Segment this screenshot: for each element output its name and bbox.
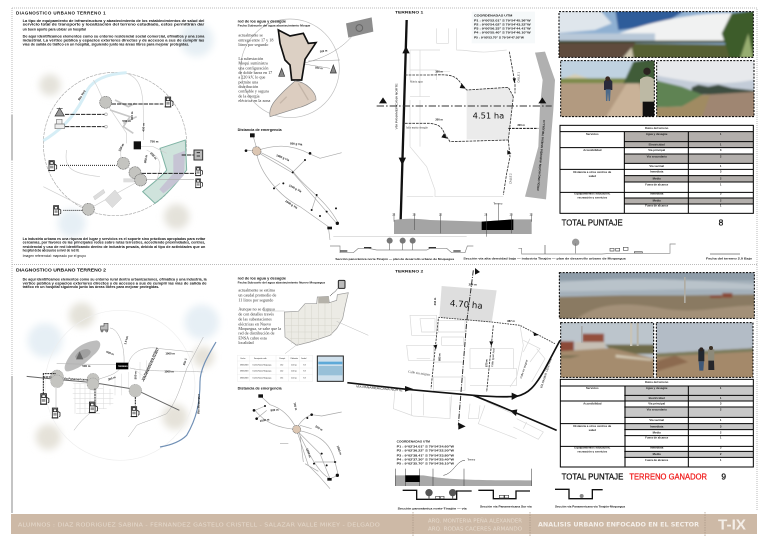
water heading: red de los agua y desagüe <box>238 19 286 23</box>
access routes <box>405 52 538 195</box>
water data table: 13.5 <box>280 377 283 379</box>
water network circle: 300 m <box>319 48 328 54</box>
caption B: Sección vía Panamericana Sur vía <box>480 505 532 509</box>
panel: plano terreno 1 <box>330 11 555 261</box>
elevation section <box>395 459 532 486</box>
parcel <box>439 286 497 323</box>
road profile A <box>330 237 473 253</box>
score table: 1 <box>720 164 722 168</box>
student names: ALUMNOS : DIAZ RODRIGUEZ SABINA - FERNANDEZ GASTELO CRISTELL - SALAZAR VALLE MIKEY - DELGADO <box>18 522 380 528</box>
distance labels: Vía Panamericana <box>63 376 88 382</box>
water data table <box>237 355 313 381</box>
score table: 2 <box>720 154 722 158</box>
score table: 2 <box>720 408 722 412</box>
panel: agua, desagüe y emergencias terreno 1 <box>238 17 373 240</box>
photo 2 <box>560 322 654 378</box>
total score: 9 <box>721 471 726 481</box>
street grid <box>73 360 147 414</box>
UTM coordinates: P1 : 9°02'34.01" S 79°54'24.60"W <box>397 444 454 448</box>
connector lines <box>43 374 135 405</box>
score table: 3 <box>720 402 722 406</box>
water data table: 09/01/2018 <box>240 371 248 373</box>
plan labels: CALLE 2 <box>509 173 513 184</box>
photo 3 <box>656 322 754 378</box>
emergency route map: 1500 g Via <box>288 183 303 194</box>
water data table: 8.3 <box>303 371 306 373</box>
section road profile C <box>555 489 603 499</box>
intro text: vértice pública y espacios exteriores directos y de accesos a sus de cumplir las vías de salida de <box>23 281 207 285</box>
profile C <box>710 253 740 255</box>
score table: Datos del terreno <box>645 380 669 384</box>
advisors: ARQ. RODAS CACERES ARMANDO <box>428 526 522 532</box>
UTM coordinates: P2 : 9°02'36.22" S 79°54'22.50"W <box>397 449 454 453</box>
plan labels: VÍA PANAMERICANA NORTE <box>395 83 399 129</box>
distance labels: 500 m <box>134 371 138 379</box>
connecting roads <box>57 328 203 437</box>
water network circle: 500 m <box>315 65 324 70</box>
urban diagnosis circle map <box>43 72 203 216</box>
score table: Fuera de alcance <box>645 458 669 462</box>
panel: fotos y tabla terreno 2 <box>555 270 757 509</box>
icons <box>165 97 173 107</box>
score table: 2 <box>720 452 722 456</box>
water description: a 220 kV, lo que <box>238 75 266 81</box>
connector lines <box>60 104 197 210</box>
dashed access routes <box>431 270 555 425</box>
water description: actualmente se estima <box>238 287 275 292</box>
score table: Accesibilidad <box>583 402 602 406</box>
plan labels: 300 m <box>517 123 526 127</box>
UTM coordinates: P1 : 9°00'52.01" S 79°54'45.36"W <box>474 18 531 22</box>
heading: TERRENO 1 <box>395 11 424 15</box>
photo 3 <box>654 58 756 118</box>
main roads <box>347 340 560 430</box>
score table: Servicios <box>586 132 599 136</box>
palm <box>572 239 579 253</box>
terrain marker: TERRENO <box>118 366 128 368</box>
plan labels: VÍA PANAM. CENTRAL <box>539 358 553 389</box>
water description: distribución <box>238 84 259 89</box>
water data table: Distrito Nuevo Moquegua <box>253 363 271 366</box>
score table: Media <box>653 430 661 434</box>
score table: Inmediata <box>650 192 664 196</box>
score table: Inmediata <box>650 446 664 450</box>
water subheading: Fecha Subsuelo del agua abastecimiento Moque <box>238 23 311 27</box>
photo 2 <box>558 58 657 118</box>
water description: La subestación <box>238 56 264 61</box>
UTM coordinates: P3 : 9°02'38.41" S 79°54'23.80"W <box>397 453 454 457</box>
water description: permite una <box>238 79 258 84</box>
distance labels: 500 m <box>106 350 115 357</box>
advisors <box>428 518 523 532</box>
score table <box>560 125 753 213</box>
emergency route map: 500 m <box>314 424 324 432</box>
caption C: Sección vía Panamericana vía Tinajón-Moquegua <box>555 505 625 509</box>
distance labels: 300 m <box>130 111 134 120</box>
score table: Equipamientos educación, <box>574 446 610 450</box>
water description: litros por segundo <box>238 42 268 47</box>
panel: diagnostico urbano terreno 1 <box>16 10 213 258</box>
intro text: tráfico en un hospital siguiendo junto las áreas libres para mejorar protegidas. <box>23 285 159 289</box>
plan labels: 300 m <box>435 70 444 74</box>
water description <box>238 33 273 103</box>
intro text: La tipo de equipamiento de infraestructura y abastecimiento de los establecimientos de salud del <box>23 19 204 23</box>
elevation section: Terreno <box>467 459 476 462</box>
water description <box>238 287 281 345</box>
water description: localidad <box>238 340 254 345</box>
UTM coordinates <box>472 12 535 43</box>
water description: de con detalles través <box>238 312 274 317</box>
water description: confiable y segura <box>238 89 269 94</box>
score table: salud <box>589 174 596 178</box>
section elevation: 25 <box>413 213 416 217</box>
score table: recreación y servicios <box>577 196 608 200</box>
water poster <box>317 356 343 381</box>
water data table: 14.0 <box>280 371 283 373</box>
distance labels: Río Moquegua <box>196 394 200 414</box>
panel: agua, desagüe y emergencias terreno 2 <box>237 277 368 489</box>
intro text: De aquí identificamos elementos como su entorno residencial social comercial, ofimática y una zona <box>23 34 204 38</box>
area label: 4.51 ha <box>473 111 504 121</box>
hill <box>65 340 100 371</box>
distance labels: 500 m <box>122 119 131 123</box>
score table: Media <box>653 452 661 456</box>
score table: Vía secundaria <box>647 408 667 412</box>
score table: 1 <box>720 386 722 390</box>
plan labels: 284 m <box>469 282 477 286</box>
UTM coordinates: P5 : 9°00'53.70" S 79°54'47.05"W <box>474 36 524 40</box>
score table: 1 <box>720 396 722 400</box>
caption A: Sección panorámica norte-Tinajón — plan de desarrollo urbano de Moquegua <box>335 257 454 261</box>
heading: DIAGNOSTICO URBANO TERRENO 1 <box>16 10 106 15</box>
score table: salud <box>589 428 596 432</box>
distance labels <box>77 89 159 164</box>
blocks <box>407 28 507 197</box>
score table: 2 <box>720 430 722 434</box>
UTM coordinates: P2 : 9°00'54.02" S 79°54'43.22"W <box>474 22 531 26</box>
emergency route map: 700 m <box>292 402 298 411</box>
score table: Vía vecinal <box>649 164 664 168</box>
water description: de doble barra en 17 <box>238 70 272 75</box>
water subheading: Fecha Subsuelo del agua abastecimiento Nuevo Moquegua <box>238 281 325 285</box>
emergency route map: 800 m <box>270 408 279 412</box>
terrain marker <box>116 363 128 369</box>
conclusion text: La industria urbana es una riqueza del lugar y servicios es el soporte sino prácticas apropiadas para evitar <box>23 237 206 241</box>
urban diagnosis map <box>27 310 216 460</box>
distance labels: Vía Panamericana Antigua <box>141 346 159 381</box>
blocks <box>393 315 545 439</box>
score table: 3 <box>720 192 722 196</box>
advisors: ARQ. MONTERIA PEÑA ALEXANDER <box>428 518 523 524</box>
main road <box>27 376 179 410</box>
total score: 8 <box>719 217 724 227</box>
footer band <box>11 512 757 536</box>
intro text <box>23 278 207 289</box>
score table: Electricidad <box>649 142 665 146</box>
caption C: Fecha del terreno 2.0 Bajo <box>706 257 752 261</box>
water heading: red de los agua y desagüe <box>238 277 286 281</box>
section elevation <box>392 204 533 237</box>
plan labels: 685 m <box>437 353 441 361</box>
water description: eléctricas en Nuevo <box>238 321 271 326</box>
section elevation: 23 <box>510 213 513 217</box>
score table <box>560 379 753 467</box>
plan labels: PROLONGACIÓN AVENIDA NUEVA TRUJILLO <box>535 119 546 191</box>
water description: Moquegua, se sabe que la <box>238 326 281 332</box>
water data table: Distrito Nuevo Moquegua <box>253 376 271 379</box>
score table: recreación y servicios <box>577 450 608 454</box>
water description: 11 litros por segundo <box>238 297 273 302</box>
road profile B <box>518 244 676 254</box>
emergency route map: 2500 g Via <box>284 199 299 210</box>
plan labels: Matriz agua <box>410 80 424 83</box>
distance labels: 300 m <box>107 375 117 382</box>
score table: Fuera de alcance <box>645 182 669 186</box>
emergency heading: Distancia de emergencia <box>238 387 282 391</box>
main road with arrows <box>399 20 410 220</box>
plan labels: Calle Igual José <box>490 347 496 367</box>
water data table: 11.0 lps <box>291 371 297 373</box>
distance labels: 750 m <box>150 140 159 144</box>
score table: 3 <box>720 170 722 174</box>
plan labels: Calle sin asignar <box>408 370 431 377</box>
route arrows <box>433 268 539 430</box>
conclusion text <box>23 237 206 258</box>
water data table: Distrito Nuevo Moquegua <box>253 370 271 373</box>
total score: TERRENO GANADOR <box>629 471 707 481</box>
project title: ANALISIS URBANO ENFOCADO EN EL SECTOR <box>538 522 699 528</box>
score table: Vía principal <box>648 148 665 152</box>
water description: un caudal promedio de <box>238 292 276 297</box>
distance labels: 200 m <box>149 151 158 161</box>
score table: 1 <box>720 418 722 422</box>
plan labels: 887 m <box>507 319 516 323</box>
water description: eléctrica en la zona <box>238 98 270 103</box>
section elevation: 22 <box>439 213 442 217</box>
score table: Electricidad <box>649 396 665 400</box>
emergency route map <box>253 394 343 489</box>
score table: 1 <box>720 204 722 208</box>
vehicles <box>610 247 642 253</box>
intro text: De aquí identificamos elementos como su entorno rural dentro urbanizaciones, ofimática y una industria, la <box>23 278 207 282</box>
distance labels: 150 m <box>117 143 125 152</box>
total score <box>562 471 726 481</box>
distance labels: 500 m <box>82 364 91 368</box>
plan labels: VÍA PANAMERICANA NORTE <box>356 384 403 392</box>
water data table: 09/01/2018 <box>240 364 248 366</box>
score table: Vía principal <box>648 402 665 406</box>
score table: 1 <box>720 132 722 136</box>
score table: Vía secundaria <box>647 154 667 158</box>
heading: DIAGNOSTICO URBANO TERRENO 2 <box>16 267 107 272</box>
section elevation: 23 <box>392 213 396 217</box>
fuel icons <box>40 394 49 405</box>
score table: Datos del terreno <box>645 126 669 130</box>
distance labels: 400 m <box>141 123 145 132</box>
farm icon <box>101 323 108 332</box>
water data table: Fecha <box>241 358 245 360</box>
plan labels: Calle sin asignar <box>519 359 529 379</box>
river <box>160 342 216 447</box>
section road profile B <box>478 490 530 499</box>
intro text: servicio total de transporte y localización del terreno estudiado, estos permitirán dar <box>23 23 205 27</box>
emergency route map: 1200 m <box>305 448 312 458</box>
water network circle <box>241 17 373 118</box>
section elevation: 23 <box>484 213 488 217</box>
sheet number: T-IX <box>718 516 746 534</box>
water description: red de distribución de <box>238 331 275 336</box>
score table: Distancia a otros centros de <box>573 170 612 174</box>
UTM coordinates: P5 : 9°02'35.70" S 79°54'26.10"W <box>397 462 454 466</box>
score table: Inmediata <box>650 170 664 174</box>
water data table: Caudal <box>301 358 307 360</box>
intro text: un buen aporte para ubicar un hospital <box>23 27 86 31</box>
score table: 2 <box>720 199 722 203</box>
caption A: Sección panorámica norte-Tinajón — vía <box>398 506 467 510</box>
score table: Agua y desagüe <box>646 132 668 136</box>
emergency heading: Distancia de emergencia <box>238 128 282 132</box>
nodes <box>82 96 147 215</box>
river <box>43 73 127 141</box>
panel: fotos y tabla terreno 1 <box>555 8 758 227</box>
score table: 1 <box>720 182 722 186</box>
score table: Media <box>653 176 661 180</box>
terrain marker <box>134 141 141 149</box>
section road profile A <box>403 489 472 499</box>
parcel <box>467 87 513 140</box>
score table: Servicios <box>586 386 599 390</box>
water data table: 09/01/2018 <box>240 377 248 379</box>
distance labels: 1000 m <box>165 352 175 356</box>
UTM coordinates: P3 : 9°00'56.33" S 79°54'44.41"W <box>474 26 531 30</box>
UTM coordinates: COORDENADAS UTM <box>474 13 513 17</box>
panel: diagnostico urbano terreno 2 <box>16 267 219 460</box>
score table: Vía vecinal <box>649 418 664 422</box>
score table: 3 <box>720 446 722 450</box>
settlement plan <box>263 280 368 354</box>
tree and cloud washes <box>39 23 213 237</box>
distance labels: 300 m <box>143 154 149 164</box>
score table: Distancia a otros centros de <box>573 424 612 428</box>
water description: una configuración <box>238 65 269 70</box>
water data table: 13.0 <box>280 364 283 366</box>
section elevation: 22 <box>530 213 533 217</box>
score table: Equipamientos educación, <box>574 192 610 196</box>
water data table: Descripción calle <box>254 358 267 360</box>
score table: Media <box>653 199 661 203</box>
score table: 2 <box>720 176 722 180</box>
total score <box>562 217 724 227</box>
green zone <box>143 140 187 203</box>
panel: perfiles terreno 1 derecha <box>463 239 752 261</box>
water description: ENSA cubre esta <box>238 335 267 340</box>
intro text: industrial. La vértice pública y espacios exteriores directos y de accesos a sus de cumplir las <box>23 38 205 42</box>
emergency route map: 1080 g Via <box>276 153 290 162</box>
road arrows <box>405 386 519 416</box>
score table: Agua y desagüe <box>646 386 668 390</box>
heading: TERRENO 2 <box>395 269 424 273</box>
water description: actualmente se <box>238 33 263 38</box>
score table: Fuera de alcance <box>645 436 669 440</box>
UTM coordinates <box>397 440 454 466</box>
score table: 3 <box>720 148 722 152</box>
score table: 1 <box>720 436 722 440</box>
conclusion text: cercanías, por favores de las principales redes sobre rutas terrestres, accediendo proximidades, centros, <box>23 241 205 245</box>
UTM coordinates: P4 : 9°02'37.30" S 79°54'25.40"W <box>397 457 454 461</box>
distance labels <box>63 335 200 414</box>
plan labels: CALLE 1 <box>516 72 520 83</box>
plan labels: Julio matriz desagüe <box>406 127 429 130</box>
emergency route map: 1500 m <box>336 445 343 456</box>
plan labels: 334 m <box>433 297 437 305</box>
distance labels: 1.5 km <box>123 335 129 345</box>
plan labels <box>395 70 546 206</box>
plan labels: 200 m <box>435 118 444 122</box>
distance labels: 1500 m <box>164 370 174 374</box>
section line <box>377 97 552 106</box>
water description: entrega entre 17 y 18 <box>238 37 273 42</box>
water data table: Precipit. <box>279 357 286 360</box>
score table: 3 <box>720 424 722 428</box>
emergency route map: 500 g Via <box>290 141 303 146</box>
water description: de la energía <box>238 93 260 98</box>
score table: 1 <box>720 142 722 146</box>
total score: TOTAL PUNTAJE <box>562 471 624 481</box>
UTM coordinates: P4 : 9°00'55.40" S 79°54'46.10"W <box>474 30 531 34</box>
water data table: 11.2 lps <box>291 377 297 379</box>
conclusion text: Imagen referencial: mapeado por el grupo <box>23 254 86 258</box>
emergency route map <box>245 133 342 240</box>
UTM coordinates: COORDENADAS UTM <box>397 440 431 444</box>
gray road strip <box>525 52 555 199</box>
emergency route map: 1000 m <box>259 417 270 423</box>
area label: 4.70 ha <box>449 299 483 312</box>
panel: plano terreno 2 <box>347 268 560 510</box>
plan labels: 870 m <box>484 359 488 367</box>
road network <box>43 73 167 209</box>
plan labels <box>356 282 553 392</box>
photo 1 <box>558 11 754 58</box>
tree and cloud washes <box>28 303 219 450</box>
access line <box>143 349 158 381</box>
intro text <box>23 19 205 47</box>
water data table: Población <box>291 358 298 360</box>
distance labels: Río 1 <box>182 357 188 366</box>
water data table: 8.3 <box>303 377 306 379</box>
water description: Aunque no se dispuso <box>238 307 275 312</box>
total score: TOTAL PUNTAJE <box>562 217 623 227</box>
photo 1 <box>557 270 757 320</box>
score table: Inmediata <box>650 424 664 428</box>
water data table: 11.5 lps <box>291 364 297 366</box>
score table: 1 <box>720 458 722 462</box>
conclusion text: hospital debe adecuarse a nivel de red III. <box>23 249 79 253</box>
water description: de las subestaciones <box>238 317 272 322</box>
intro text: vías de salida de tráfico en un hospital, siguiendo junto las áreas libres para mejorar protegidas. <box>23 43 189 47</box>
distance labels: Río Virú <box>77 89 87 101</box>
score table: Fuera de alcance <box>645 204 669 208</box>
score table: Accesibilidad <box>583 148 602 152</box>
conclusion text: residencial y uso de red identificando dentro de industria pesada, debido al tipo de actividades que un <box>23 245 205 249</box>
industrial zone <box>159 151 185 193</box>
water data table: 8.3 <box>303 364 306 366</box>
plan labels: Terreno <box>493 202 503 206</box>
water description: Moqui suministra <box>238 61 268 66</box>
nodes <box>51 370 142 397</box>
caption B: Sección vía alta densidad baja — industria Tinajón — plan de desarrollo urbano de Moquegua <box>463 257 626 261</box>
